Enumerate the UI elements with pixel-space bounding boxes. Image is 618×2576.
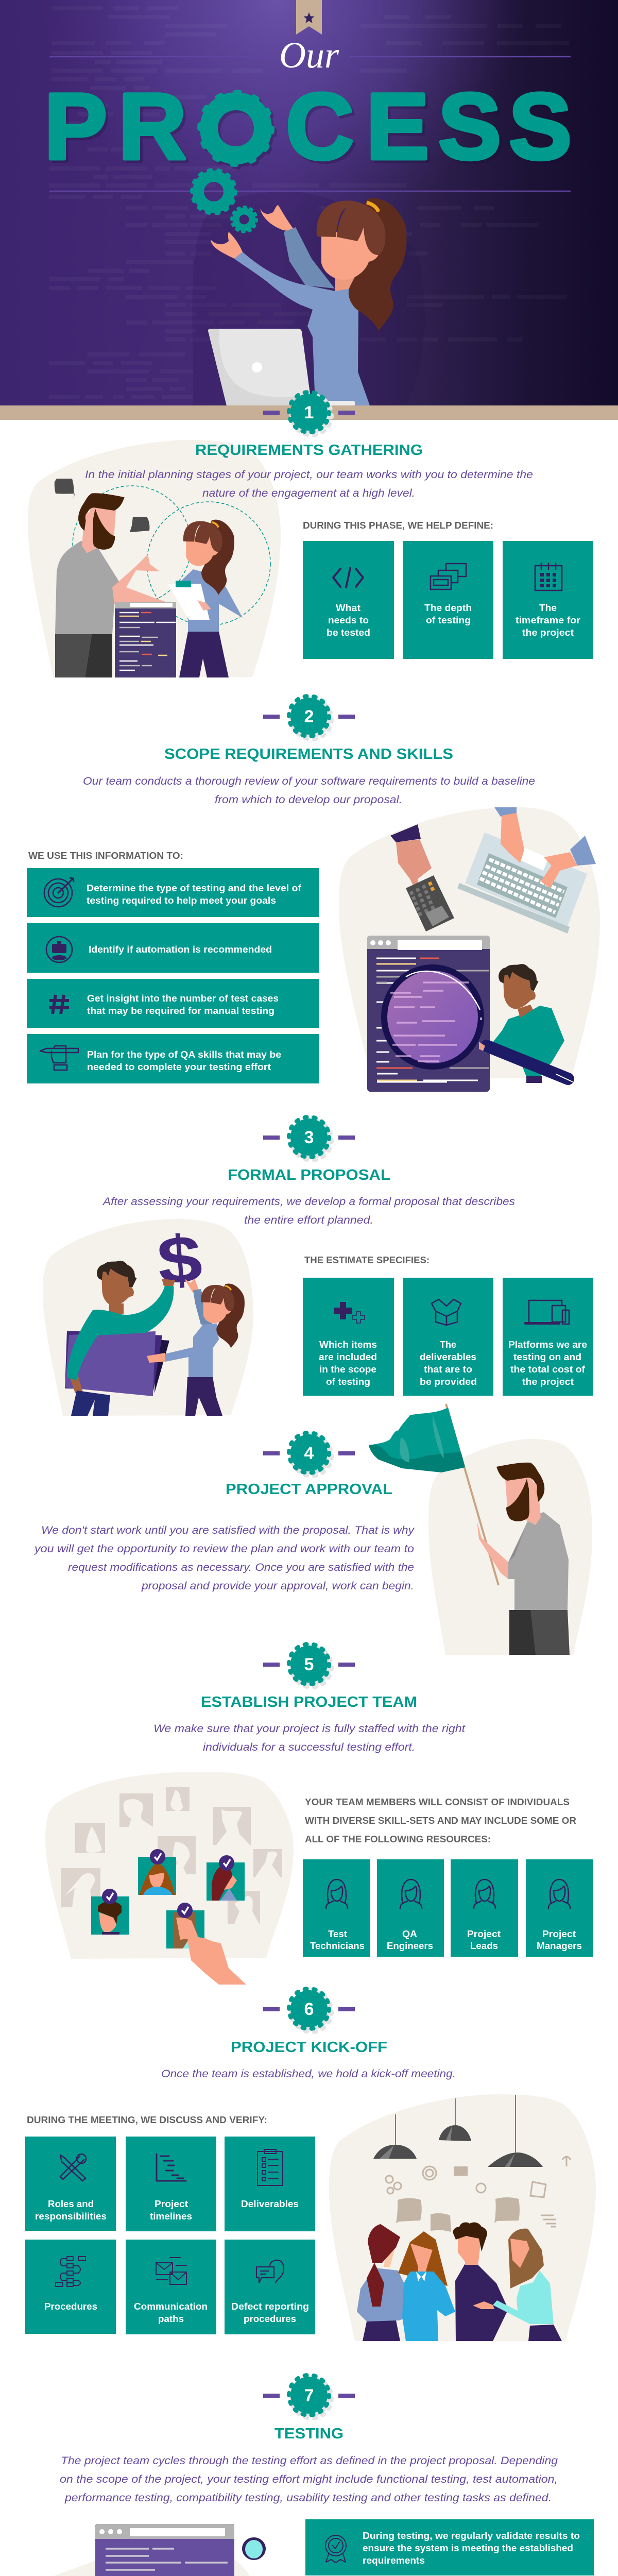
heading: FORMAL PROPOSAL: [228, 1167, 390, 1183]
section 5: establish project team: [45, 1694, 593, 1985]
card: communication paths: paths: [158, 2313, 184, 2324]
body text: request modifications as necessary. Once you are satisfied with the: [68, 1562, 414, 1573]
icon: person: [400, 1879, 422, 1908]
step 1 badge: [263, 392, 355, 435]
subheading: WE USE THIS INFORMATION TO:: [28, 850, 183, 861]
illustration: choosing team profiles: [45, 1772, 294, 1985]
heading: ESTABLISH PROJECT TEAM: [201, 1694, 417, 1710]
subheading: DURING THE MEETING, WE DISCUSS AND VERIFY:: [27, 2114, 267, 2125]
illustration: team meeting: [329, 2094, 596, 2341]
pointing hand: [185, 1918, 246, 1985]
bar: plan QA skills: Plan for the type of QA skills that may be: [87, 1049, 281, 1060]
card: project managers: Managers: [537, 1940, 582, 1951]
card: platforms: testing on and: [513, 1351, 581, 1362]
card: items in scope: of testing: [326, 1376, 370, 1387]
icon: target: [44, 878, 74, 907]
woman with red hair: [357, 2224, 440, 2341]
illustration: man with flag: [369, 1404, 592, 1655]
card: project managers: [526, 1859, 593, 1957]
subheading: DURING THIS PHASE, WE HELP DEFINE:: [303, 520, 493, 531]
card: defect reporting: procedures: [244, 2313, 296, 2324]
bar: validate results: During testing, we regularly validate results to: [363, 2530, 580, 2541]
card: test technicians: [303, 1859, 370, 1957]
bar: insight into test cases: that may be required for manual testing: [87, 1005, 274, 1016]
woman with orange hair: [398, 2231, 455, 2341]
woman with light top: [473, 2229, 562, 2341]
intro text: individuals for a successful testing effort.: [203, 1741, 415, 1753]
illustration: reviewing requirements: [339, 807, 600, 1092]
icon: layered windows: [431, 564, 466, 589]
bar: determine type of testing: testing required to help meet your goals: [87, 895, 276, 906]
card: what needs to be tested: What: [336, 602, 360, 613]
intro text: We make sure that your project is fully staffed with the right: [153, 1723, 466, 1735]
icon: speech and ear: [256, 2260, 284, 2283]
step 4 badge: [263, 1433, 355, 1476]
card: the timeframe for the project: The: [539, 602, 557, 613]
illustration: proposal: [43, 1219, 253, 1416]
card: test technicians: Test: [328, 1928, 347, 1939]
bar: insight into test cases: [27, 979, 319, 1028]
section 6: project kick-off: [25, 2039, 596, 2341]
bar: plan QA skills: needed to complete your testing effort: [87, 1061, 271, 1072]
body text: We don't start work until you are satisfied with the proposal. That is why: [41, 1524, 415, 1536]
card: project leads: Leads: [470, 1940, 498, 1951]
step 3 badge: 3: [304, 1128, 314, 1147]
title: Our: Our: [279, 35, 339, 76]
subheading: WITH DIVERSE SKILL-SETS AND MAY INCLUDE SOME OR: [305, 1815, 576, 1826]
bar: identify automation: Identify if automation is recommended: [89, 944, 272, 955]
card: platforms: the total cost of: [510, 1364, 586, 1375]
card: platforms: Platforms we are: [508, 1339, 587, 1350]
section 4: project approval: [33, 1404, 592, 1655]
card: procedures: [25, 2240, 116, 2334]
intro text: Once the team is established, we hold a kick-off meeting.: [161, 2068, 456, 2080]
step 7 badge: 7: [304, 2386, 314, 2405]
subheading: ALL OF THE FOLLOWING RESOURCES:: [305, 1834, 491, 1844]
intro text: on the scope of the project, your testing effort might include functional testing, test automation,: [60, 2473, 558, 2485]
card: deliverables: be provided: [420, 1376, 477, 1387]
ribbon with star: [296, 0, 322, 35]
step 5 badge: 5: [304, 1655, 314, 1674]
card: the timeframe for the project: [503, 541, 593, 659]
card: deliverables: that are to: [424, 1364, 472, 1375]
card: the depth of testing: The depth: [424, 602, 472, 613]
bar: validate results: ensure the system is meeting the established: [363, 2543, 573, 2553]
card: deliverables: [225, 2137, 315, 2231]
card: deliverables: The: [440, 1339, 456, 1350]
dollar sign: $: [154, 1221, 205, 1299]
card: project leads: Project: [467, 1928, 501, 1939]
bar: plan QA skills: [27, 1034, 319, 1083]
card: items in scope: are included: [319, 1351, 377, 1362]
card: what needs to be tested: needs to: [328, 615, 369, 625]
card: what needs to be tested: [303, 541, 394, 659]
body text: you will get the opportunity to review the plan and work with our team to: [33, 1543, 414, 1555]
intro text: performance testing, compatibility testing, usability testing and other testing tasks as defined.: [64, 2492, 552, 2504]
intro text: from which to develop our proposal.: [215, 794, 402, 806]
card: platforms: the project: [522, 1376, 574, 1387]
title: PROCESS: [44, 74, 572, 180]
step 2 badge: 2: [304, 707, 314, 726]
card: deliverables: deliverables: [420, 1351, 476, 1362]
intro text: [60, 2455, 558, 2504]
step 5 badge: [263, 1644, 355, 1687]
card: timelines: timelines: [150, 2211, 192, 2222]
subheading: THE ESTIMATE SPECIFIES:: [304, 1255, 430, 1265]
lamps: [373, 2095, 543, 2167]
icon: gantt: [157, 2154, 186, 2181]
intro text: [85, 469, 533, 499]
card: procedures: Procedures: [44, 2301, 97, 2312]
card: roles: [25, 2137, 116, 2231]
body text: proposal and provide your approval, work can begin.: [141, 1580, 414, 1592]
intro text: [83, 775, 535, 806]
intro text: After assessing your requirements, we develop a formal proposal that describes: [102, 1196, 516, 1208]
card: platforms: [503, 1278, 593, 1396]
intro text: [153, 1723, 466, 1753]
heading: TESTING: [274, 2426, 344, 2442]
intro text: The project team cycles through the testing effort as defined in the project proposal. Depending: [61, 2455, 558, 2467]
icon: robot: [46, 937, 72, 962]
card: the timeframe for the project: timeframe for: [516, 615, 580, 625]
icon: devices: [524, 1300, 569, 1325]
title: PROCESS: R: [118, 74, 186, 179]
bar: determine type of testing: Determine the type of testing and the level of: [87, 883, 302, 893]
icon: tools: [60, 2155, 85, 2181]
card: the depth of testing: [403, 541, 493, 659]
section 2: scope requirements and skills: [27, 746, 600, 1092]
card: roles: responsibilities: [35, 2211, 107, 2222]
title: PROCESS: P: [44, 74, 107, 179]
profile: brown hair: [174, 1912, 198, 1948]
intro text: the entire effort planned.: [244, 1214, 373, 1226]
heading: REQUIREMENTS GATHERING: [195, 442, 423, 459]
intro text: In the initial planning stages of your project, our team works with you to determine the: [85, 469, 533, 481]
icon: open box: [432, 1299, 461, 1325]
card: communication paths: [126, 2240, 216, 2334]
card: QA engineers: QA: [402, 1928, 417, 1939]
step 3 badge: [263, 1117, 355, 1160]
speech bubbles and small icons: [386, 2156, 571, 2232]
subheading: YOUR TEAM MEMBERS WILL CONSIST OF INDIVIDUALS: [305, 1797, 570, 1807]
card: the timeframe for the project: the project: [522, 627, 574, 638]
card: deliverables: [403, 1278, 493, 1396]
section 3: formal proposal: [43, 1167, 593, 1416]
title: PROCESS: S: [509, 74, 572, 179]
title: PROCESS: E: [366, 74, 429, 179]
subheading: [305, 1797, 576, 1844]
card: roles: Roles and: [48, 2198, 94, 2209]
title: [44, 35, 572, 191]
icon: code: [333, 568, 363, 587]
intro text: nature of the engagement at a high level.: [202, 487, 415, 499]
title: PROCESS: O: [198, 75, 274, 180]
section 1: requirements gathering: [28, 440, 593, 677]
check marks: [102, 1849, 234, 1918]
card: test technicians: Technicians: [310, 1940, 365, 1951]
card: QA engineers: Engineers: [387, 1940, 433, 1951]
card: timelines: [126, 2137, 216, 2231]
bar: insight into test cases: Get insight into the number of test cases: [87, 993, 279, 1004]
card: deliverables: Deliverables: [241, 2198, 299, 2209]
profile: orange hair: [139, 1862, 175, 1895]
icon: person: [548, 1879, 570, 1908]
heading: PROJECT KICK-OFF: [231, 2039, 387, 2056]
profile: red hair: [212, 1866, 237, 1901]
card: timelines: Project: [154, 2198, 188, 2209]
step 6 badge: 6: [304, 1999, 314, 2019]
bar: identify automation: [27, 923, 319, 973]
step 7 badge: [263, 2375, 355, 2418]
bar: validate results: requirements: [363, 2555, 425, 2566]
card: the depth of testing: of testing: [426, 615, 471, 625]
icon: flow: [56, 2257, 85, 2286]
illustration: testing with robot arm: [26, 2524, 349, 2576]
header banner: [0, 0, 618, 405]
heading: PROJECT APPROVAL: [226, 1481, 392, 1498]
card: items in scope: [303, 1278, 394, 1396]
woman reaching for gears: [211, 198, 406, 405]
step 2 badge: [263, 696, 355, 739]
bar: determine type of testing: [27, 868, 319, 917]
intro text: Our team conducts a thorough review of your software requirements to build a baseline: [83, 775, 535, 787]
icon: hash: [49, 995, 69, 1014]
tan band: [0, 405, 618, 420]
illustration: discussion: [28, 440, 281, 677]
card: project leads: [451, 1859, 518, 1957]
card: items in scope: in the scope: [319, 1364, 376, 1375]
bar: validate results: [305, 2519, 594, 2575]
card: defect reporting: Defect reporting: [231, 2301, 309, 2312]
step 1 badge: 1: [304, 403, 314, 422]
card: communication paths: Communication: [134, 2301, 208, 2312]
card: QA engineers: [377, 1859, 444, 1957]
card: what needs to be tested: be tested: [327, 627, 370, 638]
icon: calendar: [535, 563, 562, 590]
heading: SCOPE REQUIREMENTS AND SKILLS: [164, 746, 453, 762]
icon: plus: [334, 1302, 365, 1323]
floating gears: [192, 170, 256, 232]
body text: [33, 1524, 415, 1592]
step 4 badge: 4: [304, 1444, 314, 1463]
man with dark sweater: [453, 2223, 508, 2341]
icon: person: [474, 1879, 495, 1908]
icon: hand with pencil: [40, 1046, 78, 1070]
laptop: [208, 329, 355, 406]
step 6 badge: [263, 1989, 355, 2032]
profile: dark hair: [98, 1902, 122, 1935]
card: defect reporting: [225, 2240, 315, 2334]
icon: mail: [156, 2258, 186, 2284]
title: PROCESS: S: [438, 74, 501, 179]
card: items in scope: Which items: [319, 1339, 377, 1350]
title: PROCESS: C: [286, 74, 354, 179]
section 7: testing: [26, 2426, 594, 2576]
icon: checklist: [258, 2149, 283, 2185]
intro text: [102, 1196, 516, 1226]
icon: ribbon badge: [325, 2535, 346, 2562]
card: project managers: Project: [542, 1928, 576, 1939]
icon: person: [326, 1879, 348, 1908]
